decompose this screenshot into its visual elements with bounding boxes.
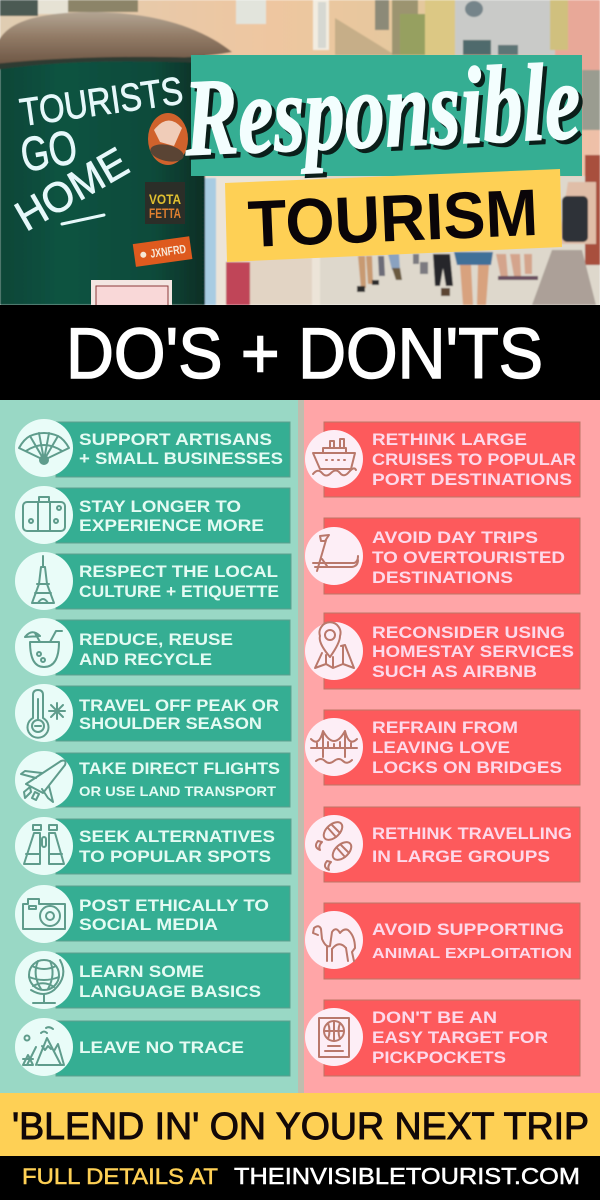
do: direct flights: [15, 751, 290, 809]
sticker: round orange: [148, 113, 188, 165]
do: learn language: [15, 951, 290, 1009]
icon: camel: [305, 911, 363, 969]
don't: day trips: TO OVERTOURISTED: [372, 549, 565, 567]
do: respect local culture: [15, 552, 291, 610]
lower street and wall: [320, 176, 600, 305]
icon: plane: [15, 751, 73, 809]
icon: bridge: [305, 718, 363, 776]
do: reduce reuse recycle: [15, 618, 290, 676]
icon: binoculars: [15, 817, 73, 875]
subtitle banner: tourism: TOURISM: [246, 175, 539, 261]
do: leave no trace: LEAVE NO TRACE: [79, 1039, 244, 1057]
sticker: vota fetta: [145, 182, 185, 224]
don't: love locks: LEAVING LOVE: [372, 739, 510, 757]
sticker: jxnfrd: JXNFRD: [149, 242, 187, 261]
footer: full details: [0, 1156, 600, 1200]
don't: large groups: IN LARGE GROUPS: [372, 848, 550, 866]
do: learn language: LANGUAGE BASICS: [79, 983, 261, 1001]
don't: large groups: [305, 807, 580, 882]
don't: large cruises: PORT DESTINATIONS: [372, 471, 572, 489]
do: post ethically: SOCIAL MEDIA: [79, 916, 218, 934]
don't: pickpockets: DON'T BE AN: [372, 1009, 497, 1027]
don't: homestay services: SUCH AS AIRBNB: [372, 663, 537, 681]
do: support artisans: SUPPORT ARTISANS: [79, 431, 272, 449]
heading band: do's + don'ts: DO'S + DON'TS: [66, 315, 543, 394]
don't: large cruises: CRUISES TO POPULAR: [372, 451, 576, 469]
do: direct flights: TAKE DIRECT FLIGHTS: [79, 760, 280, 778]
icon: globe: [15, 951, 73, 1009]
do: reduce reuse recycle: AND RECYCLE: [79, 651, 212, 669]
green pillar: [0, 55, 205, 305]
icon: gondola: [305, 527, 363, 585]
do: stay longer: STAY LONGER TO: [79, 498, 241, 516]
graffiti: tourists go home: GO: [17, 121, 81, 183]
don't: large cruises: RETHINK LARGE: [372, 431, 527, 449]
photo: Venice street with graffiti pillar: [0, 0, 600, 310]
don't: love locks: LOCKS ON BRIDGES: [372, 759, 562, 777]
sticker: jxnfrd: [133, 236, 192, 267]
icon: suitcase: [15, 486, 73, 544]
do: seek alternatives: SEEK ALTERNATIVES: [79, 828, 275, 846]
icon: passport: [305, 1008, 363, 1066]
don't: pickpockets: PICKPOCKETS: [372, 1049, 506, 1067]
panel: don'ts: [298, 400, 600, 1093]
icon: thermometer: [15, 684, 73, 742]
icon: cruise ship: [305, 430, 363, 488]
do: learn language: LEARN SOME: [79, 963, 204, 981]
icon: fan: [15, 419, 73, 477]
graffiti: tourists go home: TOURISTS: [17, 70, 186, 135]
don't: homestay services: HOMESTAY SERVICES: [372, 643, 574, 661]
do: leave no trace: [15, 1018, 290, 1076]
icon: mountains: [15, 1018, 73, 1076]
don't: homestay services: RECONSIDER USING: [372, 624, 565, 642]
don't: animal exploitation: ANIMAL EXPLOITATION: [372, 945, 572, 962]
don't: pickpockets: EASY TARGET FOR: [372, 1029, 548, 1047]
sticker: vota fetta: VOTA: [149, 191, 181, 207]
icon: map pin: [305, 622, 363, 680]
do: reduce reuse recycle: REDUCE, REUSE: [79, 631, 233, 649]
don't: large cruises: [305, 422, 580, 497]
don't: pickpockets: [305, 1000, 580, 1076]
do: support artisans: [15, 419, 290, 477]
graffiti: tourists go home: HOME: [7, 138, 136, 240]
do: seek alternatives: TO POPULAR SPOTS: [79, 848, 271, 866]
icon: eiffel tower: [15, 552, 73, 610]
do: travel off peak: [15, 684, 291, 742]
don't: homestay services: [305, 613, 580, 689]
sticker: vota fetta: FETTA: [149, 205, 181, 221]
graffiti: tourists go home: [14, 77, 182, 231]
don't: animal exploitation: [305, 903, 580, 979]
do: support artisans: + SMALL BUSINESSES: [79, 450, 283, 468]
icon: coconut drink: [15, 618, 73, 676]
don't: day trips: DESTINATIONS: [372, 569, 513, 587]
do: travel off peak: SHOULDER SEASON: [79, 715, 262, 733]
do: respect local culture: RESPECT THE LOCAL: [79, 563, 278, 581]
do: stay longer: [15, 486, 290, 544]
banner: blend in: 'BLEND IN' ON YOUR NEXT TRIP: [12, 1106, 589, 1148]
do: post ethically: [15, 885, 290, 943]
icon: camera: [15, 885, 73, 943]
do: travel off peak: TRAVEL OFF PEAK OR: [79, 697, 279, 715]
don't: day trips: [305, 518, 580, 594]
banner: blend in: [0, 1093, 600, 1156]
walkers: [358, 256, 373, 288]
don't: love locks: [305, 710, 580, 785]
don't: animal exploitation: AVOID SUPPORTING: [372, 921, 564, 939]
icon: footprints: [305, 815, 363, 873]
do: seek alternatives: [15, 817, 291, 875]
poster on pillar: [91, 280, 172, 305]
don't: day trips: AVOID DAY TRIPS: [372, 529, 538, 547]
panel: do's: [0, 400, 298, 1093]
footer: full details: FULL DETAILS AT: [22, 1164, 218, 1189]
do: respect local culture: CULTURE + ETIQUETTE: [79, 583, 279, 601]
don't: love locks: REFRAIN FROM: [372, 719, 518, 737]
title panel: teal box: [191, 55, 582, 176]
don't: large groups: RETHINK TRAVELLING: [372, 825, 572, 843]
do: direct flights: OR USE LAND TRANSPORT: [79, 783, 276, 799]
footer: full details: THEINVISIBLETOURIST.COM: [234, 1163, 580, 1189]
do: stay longer: EXPERIENCE MORE: [79, 517, 264, 535]
do: post ethically: POST ETHICALLY TO: [79, 897, 269, 915]
